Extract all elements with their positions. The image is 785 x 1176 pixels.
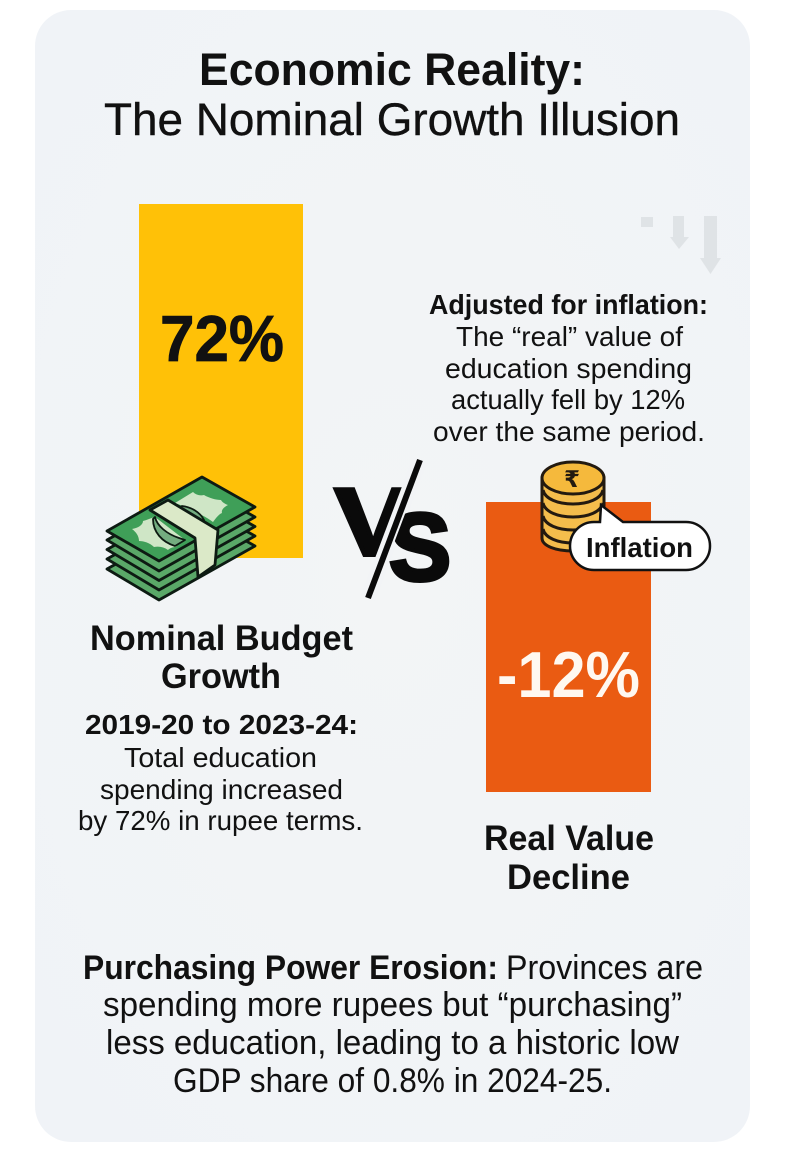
icon: rupee coin stack — [542, 462, 604, 551]
text: nominal growth description: Total education — [124, 742, 317, 773]
callout: inflation: Inflation — [586, 532, 693, 563]
icon: stack of banknotes — [107, 477, 255, 600]
value: -12%: -12% — [497, 638, 640, 711]
label: nominal budget growth: Nominal Budget — [90, 619, 353, 658]
label: nominal budget growth — [90, 619, 353, 696]
text: nominal growth description: by 72% in rupee terms. — [78, 805, 363, 836]
label: real value decline — [484, 819, 654, 897]
text: inflation adjustment note: over the same period. — [433, 416, 705, 447]
text: nominal growth description: spending increased — [100, 774, 343, 805]
text: purchasing power erosion: Purchasing Power Erosion: — [83, 949, 498, 987]
text: purchasing power erosion: spending more rupees but “purchasing” — [103, 986, 682, 1024]
text: nominal growth description — [78, 709, 363, 836]
icon: VS mark: V — [335, 469, 411, 576]
title: Economic Reality: — [199, 44, 585, 95]
label: nominal budget growth: Growth — [161, 657, 281, 696]
icon: VS mark: S — [389, 494, 451, 601]
text: inflation adjustment note: The “real” value of — [456, 321, 683, 352]
text: purchasing power erosion: GDP share of 0.8% in 2024-25. — [173, 1062, 612, 1100]
icon: rupee coin stack: ₹ — [564, 467, 580, 493]
icon: faint down arrows — [641, 216, 721, 274]
text: inflation adjustment note: actually fell by 12% — [451, 384, 685, 415]
label: real value decline: Real Value — [484, 819, 654, 858]
panel: real value column — [486, 462, 710, 792]
bar: real value decline — [486, 502, 651, 792]
title: The Nominal Growth Illusion — [104, 94, 680, 145]
panel: nominal growth column — [107, 204, 303, 600]
icon: VS mark — [335, 460, 451, 601]
text: purchasing power erosion — [83, 949, 703, 1100]
text: inflation adjustment note: Adjusted for inflation: — [429, 289, 708, 320]
text: inflation adjustment note: education spending — [445, 353, 692, 384]
callout: inflation — [570, 505, 710, 570]
label: real value decline: Decline — [507, 858, 630, 897]
bar: nominal growth — [139, 204, 303, 558]
text: purchasing power erosion: Provinces are — [506, 949, 703, 987]
title — [104, 44, 680, 145]
text: nominal growth description: 2019-20 to 2023-24: — [85, 709, 358, 740]
value: 72%: 72% — [160, 302, 284, 375]
text: purchasing power erosion: less education, leading to a historic low — [106, 1024, 679, 1062]
text: inflation adjustment note — [429, 289, 708, 447]
